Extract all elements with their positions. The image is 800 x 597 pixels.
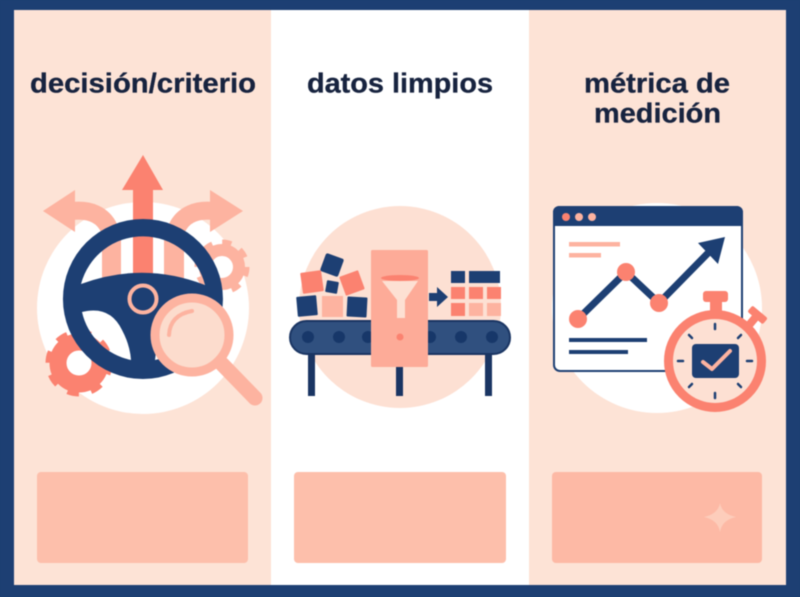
steering wheel bbox=[63, 219, 223, 379]
icon: steering wheel with arrows, gears and magnifier bbox=[37, 155, 255, 414]
arrow: centre up bbox=[122, 155, 163, 278]
icon: magnifier bbox=[155, 298, 255, 398]
icon: stopwatch bbox=[668, 291, 768, 408]
conveyor legs bbox=[308, 352, 492, 396]
heading: decisión/criterio: decisión/criterio bbox=[30, 68, 256, 99]
icon: sparkle bbox=[704, 503, 736, 532]
heading: métrica de medición: métrica de bbox=[584, 68, 730, 99]
line chart bbox=[569, 237, 725, 328]
icon: dashboard and stopwatch bbox=[552, 203, 768, 413]
text card bbox=[552, 472, 762, 563]
panel: datos limpios bbox=[271, 10, 529, 585]
side bars bbox=[102, 236, 184, 284]
icon: left gear bbox=[50, 334, 108, 392]
clean data table bbox=[451, 271, 501, 316]
heading: datos limpios: datos limpios bbox=[307, 68, 493, 99]
filter box with funnel bbox=[371, 250, 428, 367]
conveyor belt bbox=[290, 321, 510, 354]
arrow: to table bbox=[429, 287, 448, 307]
loose data blocks bbox=[296, 253, 368, 318]
text card bbox=[294, 472, 506, 563]
text card bbox=[37, 472, 248, 563]
panel: decisión/criterio bbox=[14, 10, 271, 585]
heading: métrica de medición: medición bbox=[594, 98, 721, 129]
browser window bbox=[553, 206, 743, 371]
arrow: left bbox=[43, 190, 109, 232]
heading: métrica de medición bbox=[584, 68, 730, 129]
icon: right gear bbox=[198, 243, 246, 291]
arrow: right bbox=[177, 190, 243, 232]
panel: métrica de medición bbox=[529, 10, 786, 585]
icon: data cleaning conveyor bbox=[290, 206, 510, 408]
